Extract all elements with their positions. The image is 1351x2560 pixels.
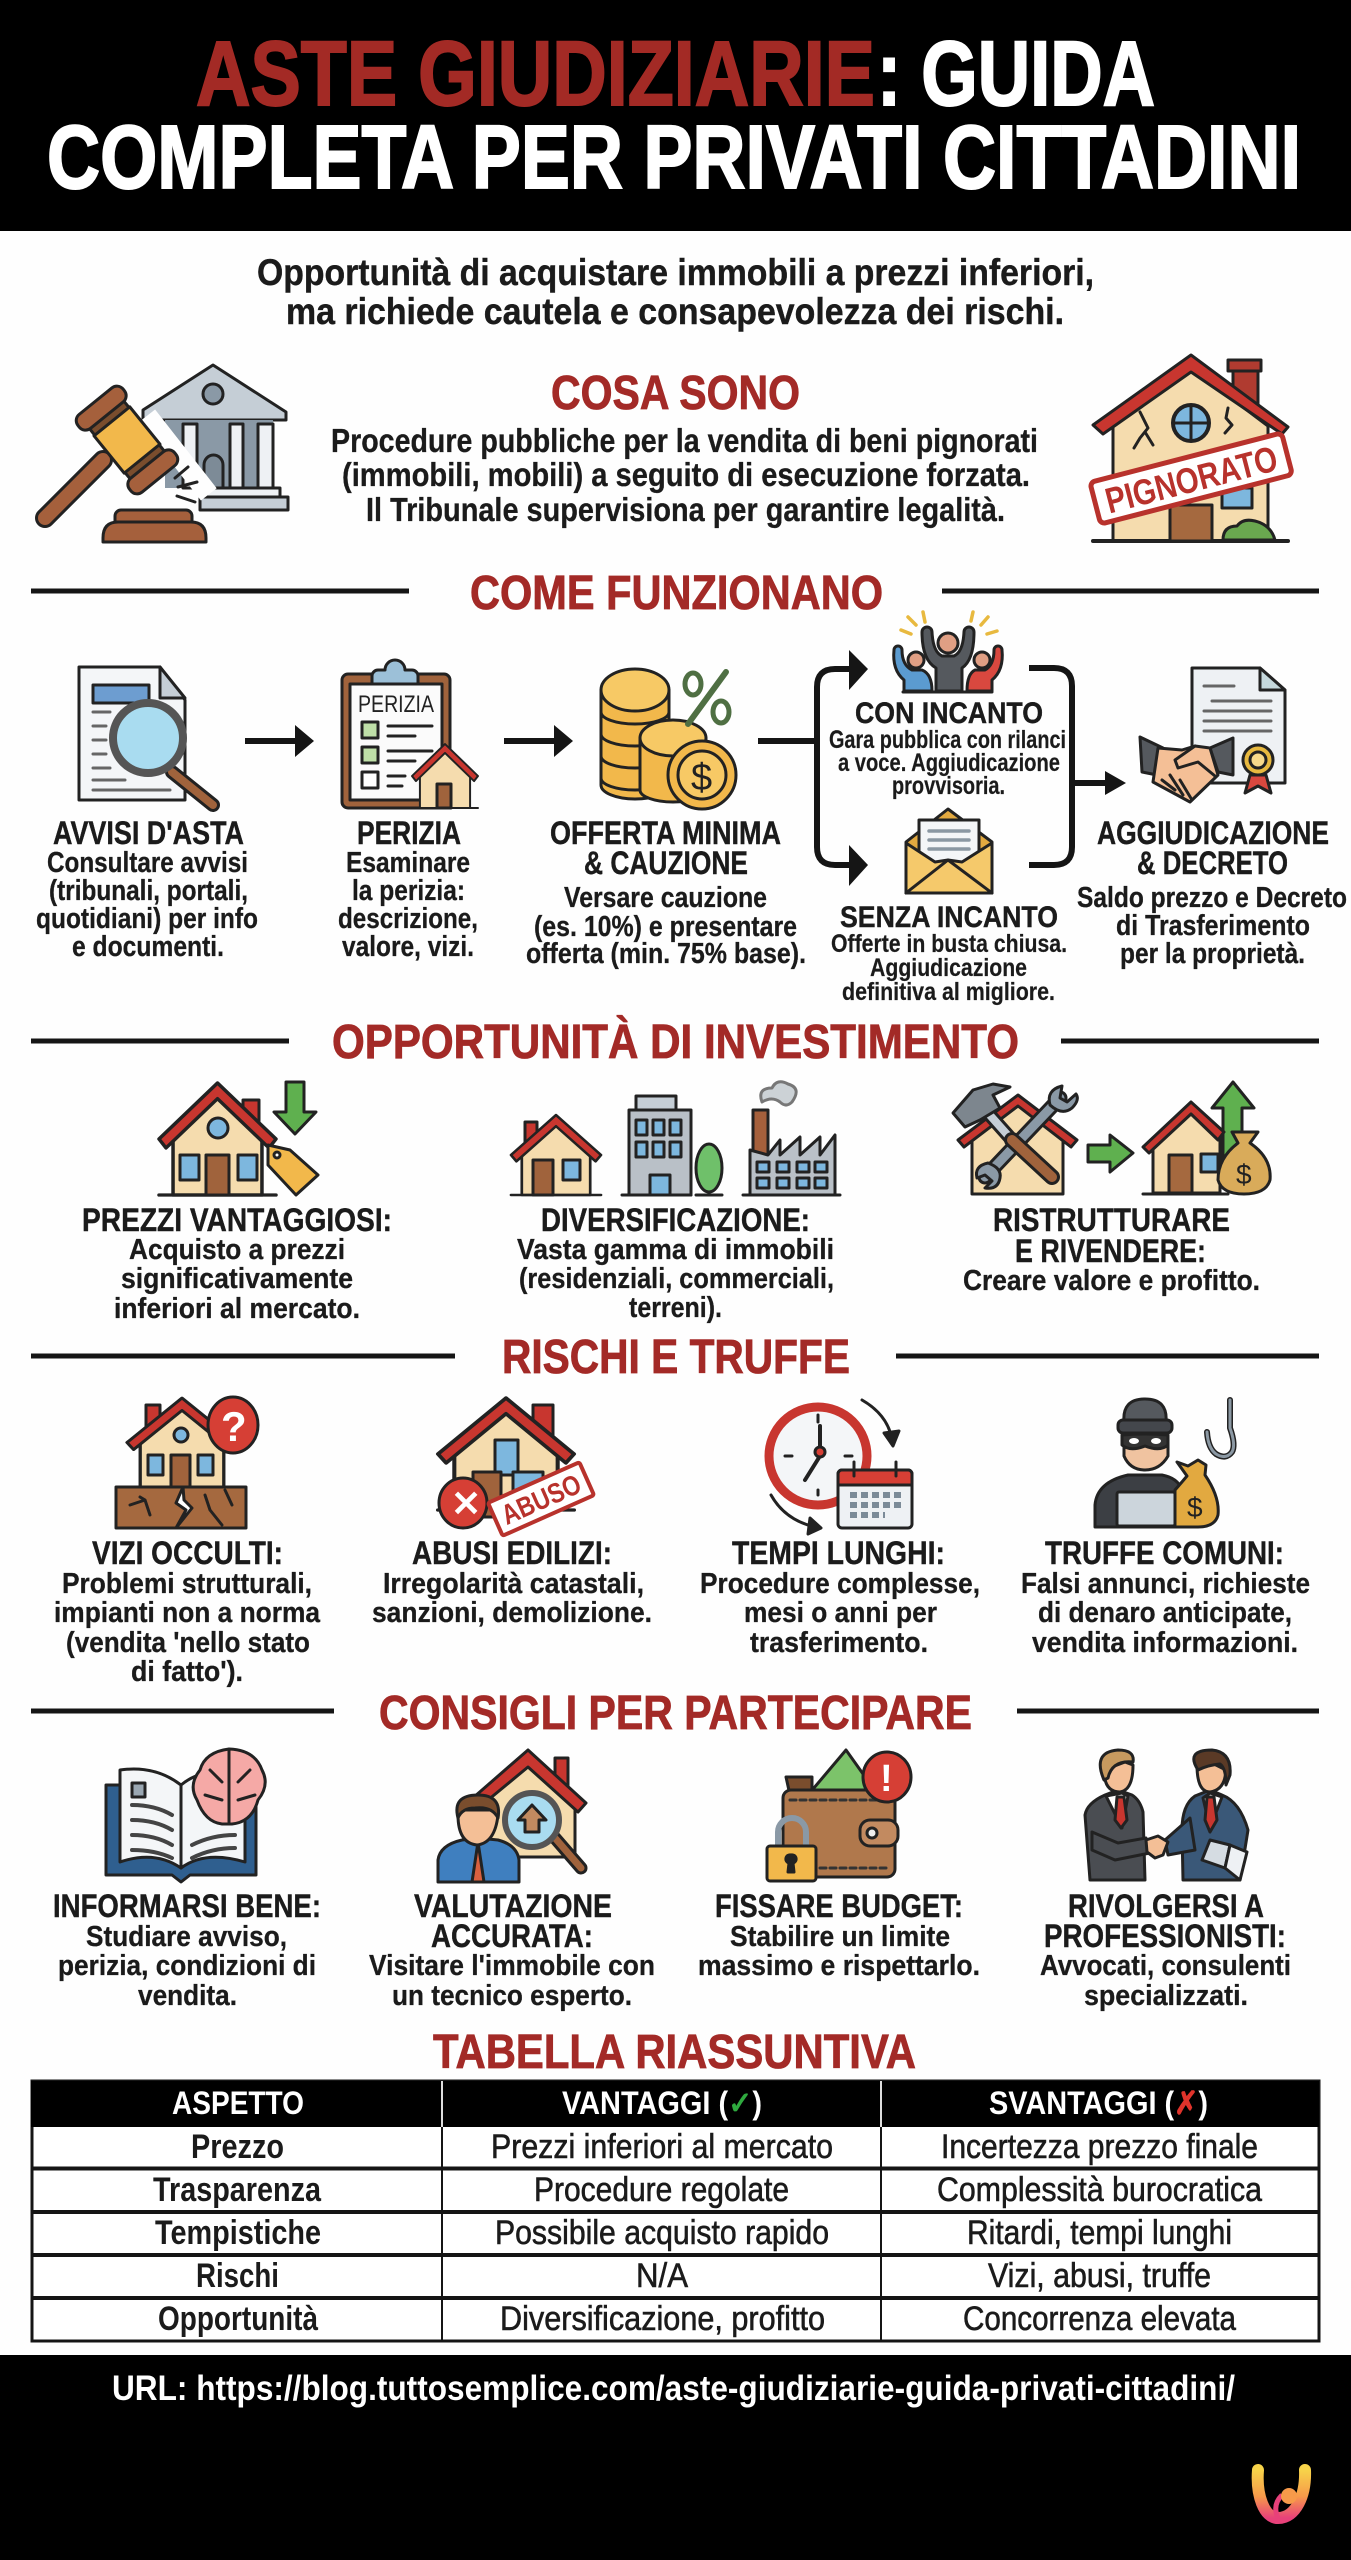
text: tempi lunghi: TEMPI LUNGHI: <box>732 1535 945 1571</box>
text: avvisi: quotidiani) per info <box>36 903 258 935</box>
row: rischi: N/A <box>636 2257 688 2295</box>
card: abusi edilizi <box>372 1398 652 1629</box>
text: ristrutturare: Creare valore e profitto. <box>963 1265 1260 1297</box>
card: tempi lunghi <box>700 1400 980 1659</box>
text: fissare budget <box>698 1888 980 1982</box>
text: truffe comuni <box>1021 1535 1310 1659</box>
text: fissare budget: Stabilire un limite <box>730 1921 950 1953</box>
title: ASTE GIUDIZIARIE <box>196 23 875 125</box>
row: prezzo <box>191 2128 1258 2166</box>
text: prezzi vantaggiosi <box>82 1202 392 1325</box>
row: opportunita: Concorrenza elevata <box>963 2300 1236 2338</box>
text: vizi occulti: di fatto'). <box>131 1656 243 1688</box>
icon: foreclosed house with stamp: PIGNORATO <box>1101 438 1282 521</box>
table header <box>172 2085 1208 2121</box>
text: valutazione: VALUTAZIONE <box>414 1888 612 1924</box>
text: aggiudicazione <box>1077 815 1347 970</box>
intro text: ma richiede cautela e consapevolezza dei rischi. <box>286 291 1064 332</box>
row: trasparenza: Procedure regolate <box>534 2171 789 2209</box>
text: definition: (immobili, mobili) a seguito di esecuzione forzata. <box>342 456 1030 493</box>
row: rischi <box>196 2257 1211 2295</box>
row: trasparenza <box>153 2171 1262 2209</box>
text: vizi occulti: Problemi strutturali, <box>62 1568 312 1600</box>
table header: ASPETTO <box>172 2085 304 2121</box>
footer <box>0 2355 1351 2560</box>
text: fissare budget: massimo e rispettarlo. <box>698 1950 980 1982</box>
text: prezzi vantaggiosi: PREZZI VANTAGGIOSI: <box>82 1202 392 1238</box>
heading: cosa sono: COSA SONO <box>551 367 800 420</box>
text: aggiudicazione: di Trasferimento <box>1116 910 1310 942</box>
card: prezzi vantaggiosi <box>82 1082 392 1325</box>
text: senza incanto: Offerte in busta chiusa. <box>831 930 1067 958</box>
text: con incanto: a voce. Aggiudicazione <box>838 749 1060 777</box>
icon: gavel and courthouse <box>45 365 288 542</box>
row: prezzo: Incertezza prezzo finale <box>941 2128 1258 2166</box>
row: tempistiche <box>155 2214 1232 2252</box>
text: tempi lunghi: Procedure complesse, <box>700 1568 980 1600</box>
title: : GUIDA <box>877 23 1155 125</box>
arrow <box>245 725 314 757</box>
step: perizia <box>338 660 478 963</box>
card: fissare budget <box>698 1750 980 1982</box>
icon: house with abuso stamp: ABUSO <box>497 1468 586 1531</box>
text: avvisi: (tribunali, portali, <box>49 875 248 907</box>
summary table <box>31 2081 1319 2341</box>
text: offerta <box>526 815 806 970</box>
text: con incanto <box>829 697 1066 800</box>
row: tempistiche: Tempistiche <box>155 2214 321 2252</box>
text: diversificazione: terreni). <box>629 1292 722 1324</box>
heading: tabella riassuntiva: TABELLA RIASSUNTIVA <box>433 2026 916 2079</box>
text: informarsi bene: vendita. <box>138 1980 237 2012</box>
text: avvisi: e documenti. <box>72 931 224 963</box>
text: rivolgersi: RIVOLGERSI A <box>1068 1888 1264 1924</box>
text: rivolgersi <box>1040 1888 1291 2012</box>
text: rivolgersi: specializzati. <box>1084 1980 1248 2012</box>
text: vizi occulti: VIZI OCCULTI: <box>92 1535 283 1571</box>
text: ristrutturare: E RIVENDERE: <box>1015 1233 1206 1269</box>
text: definition <box>331 422 1038 528</box>
text: rivolgersi: Avvocati, consulenti <box>1040 1950 1291 1982</box>
icon: two professionals shaking hands <box>1085 1750 1248 1880</box>
card: rivolgersi a professionisti <box>1040 1750 1291 2012</box>
text: offerta: & CAUZIONE <box>584 845 748 881</box>
header banner <box>0 0 1351 231</box>
text: vizi occulti: impianti non a norma <box>54 1597 321 1629</box>
text: senza incanto: SENZA INCANTO <box>840 901 1058 934</box>
table header: SVANTAGGI (✗) <box>989 2085 1208 2121</box>
panel: cosa sono <box>45 355 1292 542</box>
text: valutazione <box>369 1888 655 2012</box>
row: opportunita: Opportunità <box>158 2300 318 2338</box>
text: offerta: offerta (min. 75% base). <box>526 938 806 970</box>
text: vizi occulti: (vendita 'nello stato <box>66 1627 310 1659</box>
text: perizia: Esaminare <box>346 847 470 879</box>
text: abusi edilizi: sanzioni, demolizione. <box>372 1597 652 1629</box>
arrow: merge to aggiudicazione <box>1029 668 1126 865</box>
text: avvisi: AVVISI D'ASTA <box>53 815 244 851</box>
row: trasparenza: Complessità burocratica <box>937 2171 1262 2209</box>
icon: cracked house with question mark: ? <box>221 1403 247 1450</box>
icon: envelope <box>906 809 992 893</box>
branch: con incanto <box>829 612 1066 800</box>
row: opportunita <box>158 2300 1236 2338</box>
table header: VANTAGGI (✓) <box>562 2085 762 2121</box>
step: aggiudicazione <box>1077 668 1347 970</box>
text: informarsi bene <box>53 1888 321 2012</box>
icon: coins and percent <box>601 669 736 809</box>
text: valutazione: un tecnico esperto. <box>392 1980 632 2012</box>
text: definition: Procedure pubbliche per la vendita di beni pignorati <box>331 422 1038 459</box>
text: abusi edilizi: Irregolarità catastali, <box>383 1568 644 1600</box>
text: abusi edilizi <box>372 1535 652 1629</box>
card: valutazione accurata <box>369 1750 655 2012</box>
text: diversificazione <box>517 1202 834 1324</box>
text: diversificazione: Vasta gamma di immobili <box>517 1234 834 1266</box>
card: truffe comuni <box>1021 1399 1310 1659</box>
text: diversificazione: DIVERSIFICAZIONE: <box>541 1202 810 1238</box>
text: valutazione: ACCURATA: <box>431 1918 593 1954</box>
icon: coins and percent: $ <box>691 757 712 799</box>
text: ristrutturare: RISTRUTTURARE <box>993 1202 1230 1238</box>
row: rischi: Vizi, abusi, truffe <box>988 2257 1211 2295</box>
icon: clipboard: PERIZIA <box>358 691 434 718</box>
section: consigli per partecipare <box>31 1687 1319 2012</box>
text: perizia: la perizia: <box>352 875 465 907</box>
icon: cracked house with question mark <box>116 1397 258 1528</box>
text: avvisi: Consultare avvisi <box>47 847 248 879</box>
icon: logo <box>1258 2470 1305 2518</box>
text: informarsi bene: INFORMARSI BENE: <box>53 1888 321 1924</box>
text: aggiudicazione: per la proprietà. <box>1120 938 1305 970</box>
text: tempi lunghi: mesi o anni per <box>744 1597 937 1629</box>
icon: book and brain <box>106 1749 265 1882</box>
section: opportunita di investimento <box>31 1015 1319 1325</box>
text: perizia: valore, vizi. <box>342 931 474 963</box>
row: trasparenza: Trasparenza <box>153 2171 322 2209</box>
arrow: fork into two procedures <box>758 650 868 886</box>
heading: rischi e truffe: RISCHI E TRUFFE <box>502 1331 850 1384</box>
card: vizi occulti <box>54 1397 321 1688</box>
icon: thief with laptop and hook <box>1095 1399 1234 1527</box>
text: prezzi vantaggiosi: significativamente <box>121 1263 353 1295</box>
row: rischi: Rischi <box>196 2257 279 2295</box>
intro text: Opportunità di acquistare immobili a prezzi inferiori, <box>257 252 1094 293</box>
text: offerta: (es. 10%) e presentare <box>534 911 797 943</box>
text: fissare budget: FISSARE BUDGET: <box>715 1888 963 1924</box>
text: con incanto: provvisoria. <box>892 772 1005 800</box>
icon: thief with laptop and hook: $ <box>1187 1492 1203 1523</box>
text: diversificazione: (residenziali, commerciali, <box>519 1263 834 1295</box>
icon: raised hands crowd <box>894 612 1002 692</box>
text: perizia <box>338 815 478 963</box>
text: senza incanto <box>831 901 1067 1006</box>
icon: contract and handshake <box>1140 668 1285 802</box>
icon: tools, house and money <box>953 1082 1270 1194</box>
text: informarsi bene: perizia, condizioni di <box>58 1950 316 1982</box>
heading: come funzionano: COME FUNZIONANO <box>470 567 883 620</box>
icon: house with price tag <box>159 1082 318 1195</box>
text: valutazione: Visitare l'immobile con <box>369 1950 655 1982</box>
step: avvisi d'asta <box>36 667 258 963</box>
text: tempi lunghi: trasferimento. <box>750 1627 928 1659</box>
text: abusi edilizi: ABUSI EDILIZI: <box>412 1535 612 1571</box>
row: prezzo: Prezzi inferiori al mercato <box>491 2128 833 2166</box>
row: opportunita: Diversificazione, profitto <box>500 2300 825 2338</box>
text: senza incanto: definitiva al migliore. <box>842 978 1055 1006</box>
icon: document and magnifier <box>79 667 213 805</box>
icon: house with abuso stamp: ✕ <box>451 1483 481 1524</box>
section: come funzionano <box>31 567 1347 1006</box>
icon: tools, house and money: $ <box>1236 1159 1252 1190</box>
text: senza incanto: Aggiudicazione <box>870 954 1027 982</box>
text: tempi lunghi <box>700 1535 980 1659</box>
card: ristrutturare e rivendere <box>953 1082 1270 1297</box>
text: informarsi bene: Studiare avviso, <box>86 1921 287 1953</box>
url: URL: https://blog.tuttosemplice.com/aste-giudiziarie-guida-privati-cittadini/ <box>112 2369 1235 2408</box>
heading: consigli: CONSIGLI PER PARTECIPARE <box>379 1687 972 1740</box>
text: ristrutturare <box>963 1202 1260 1297</box>
card: diversificazione <box>511 1082 840 1324</box>
text: perizia: descrizione, <box>338 903 478 935</box>
icon: wallet, lock and alert <box>767 1750 911 1881</box>
step: offerta minima <box>526 669 806 970</box>
icon: foreclosed house with stamp <box>1090 355 1292 541</box>
text: prezzi vantaggiosi: inferiori al mercato. <box>114 1293 360 1325</box>
icon: expert and magnifier on house <box>438 1750 586 1882</box>
text: offerta: Versare cauzione <box>564 882 767 914</box>
text: truffe comuni: TRUFFE COMUNI: <box>1045 1535 1284 1571</box>
heading: opportunita: OPPORTUNITÀ DI INVESTIMENTO <box>332 1015 1019 1069</box>
text: avvisi <box>36 815 258 963</box>
text: con incanto: Gara pubblica con rilanci <box>829 726 1066 754</box>
text: truffe comuni: Falsi annunci, richieste <box>1021 1568 1310 1600</box>
text: con incanto: CON INCANTO <box>855 697 1043 730</box>
arrow <box>504 725 573 757</box>
icon: clock and calendar <box>769 1400 912 1534</box>
text: truffe comuni: di denaro anticipate, <box>1038 1597 1292 1629</box>
text: aggiudicazione: & DECRETO <box>1137 845 1288 881</box>
row: tempistiche: Possibile acquisto rapido <box>495 2214 829 2252</box>
section: rischi e truffe <box>31 1331 1319 1688</box>
text: definition: Il Tribunale supervisiona per garantire legalità. <box>366 491 1005 528</box>
icon: house with abuso stamp <box>438 1398 594 1536</box>
row: tempistiche: Ritardi, tempi lunghi <box>967 2214 1232 2252</box>
icon: wallet, lock and alert: ! <box>880 1758 893 1800</box>
card: informarsi bene <box>53 1749 321 2012</box>
title <box>47 23 1301 208</box>
intro text <box>257 252 1094 332</box>
icon: house, building and factory <box>511 1082 840 1195</box>
text: perizia: PERIZIA <box>357 815 461 851</box>
icon: clipboard <box>342 660 478 808</box>
text: truffe comuni: vendita informazioni. <box>1032 1627 1298 1659</box>
row: prezzo: Prezzo <box>191 2128 284 2166</box>
text: vizi occulti <box>54 1535 321 1688</box>
text: offerta: OFFERTA MINIMA <box>550 815 781 851</box>
text: prezzi vantaggiosi: Acquisto a prezzi <box>129 1234 345 1266</box>
branch: senza incanto <box>831 809 1067 1006</box>
text: rivolgersi: PROFESSIONISTI: <box>1044 1918 1286 1954</box>
